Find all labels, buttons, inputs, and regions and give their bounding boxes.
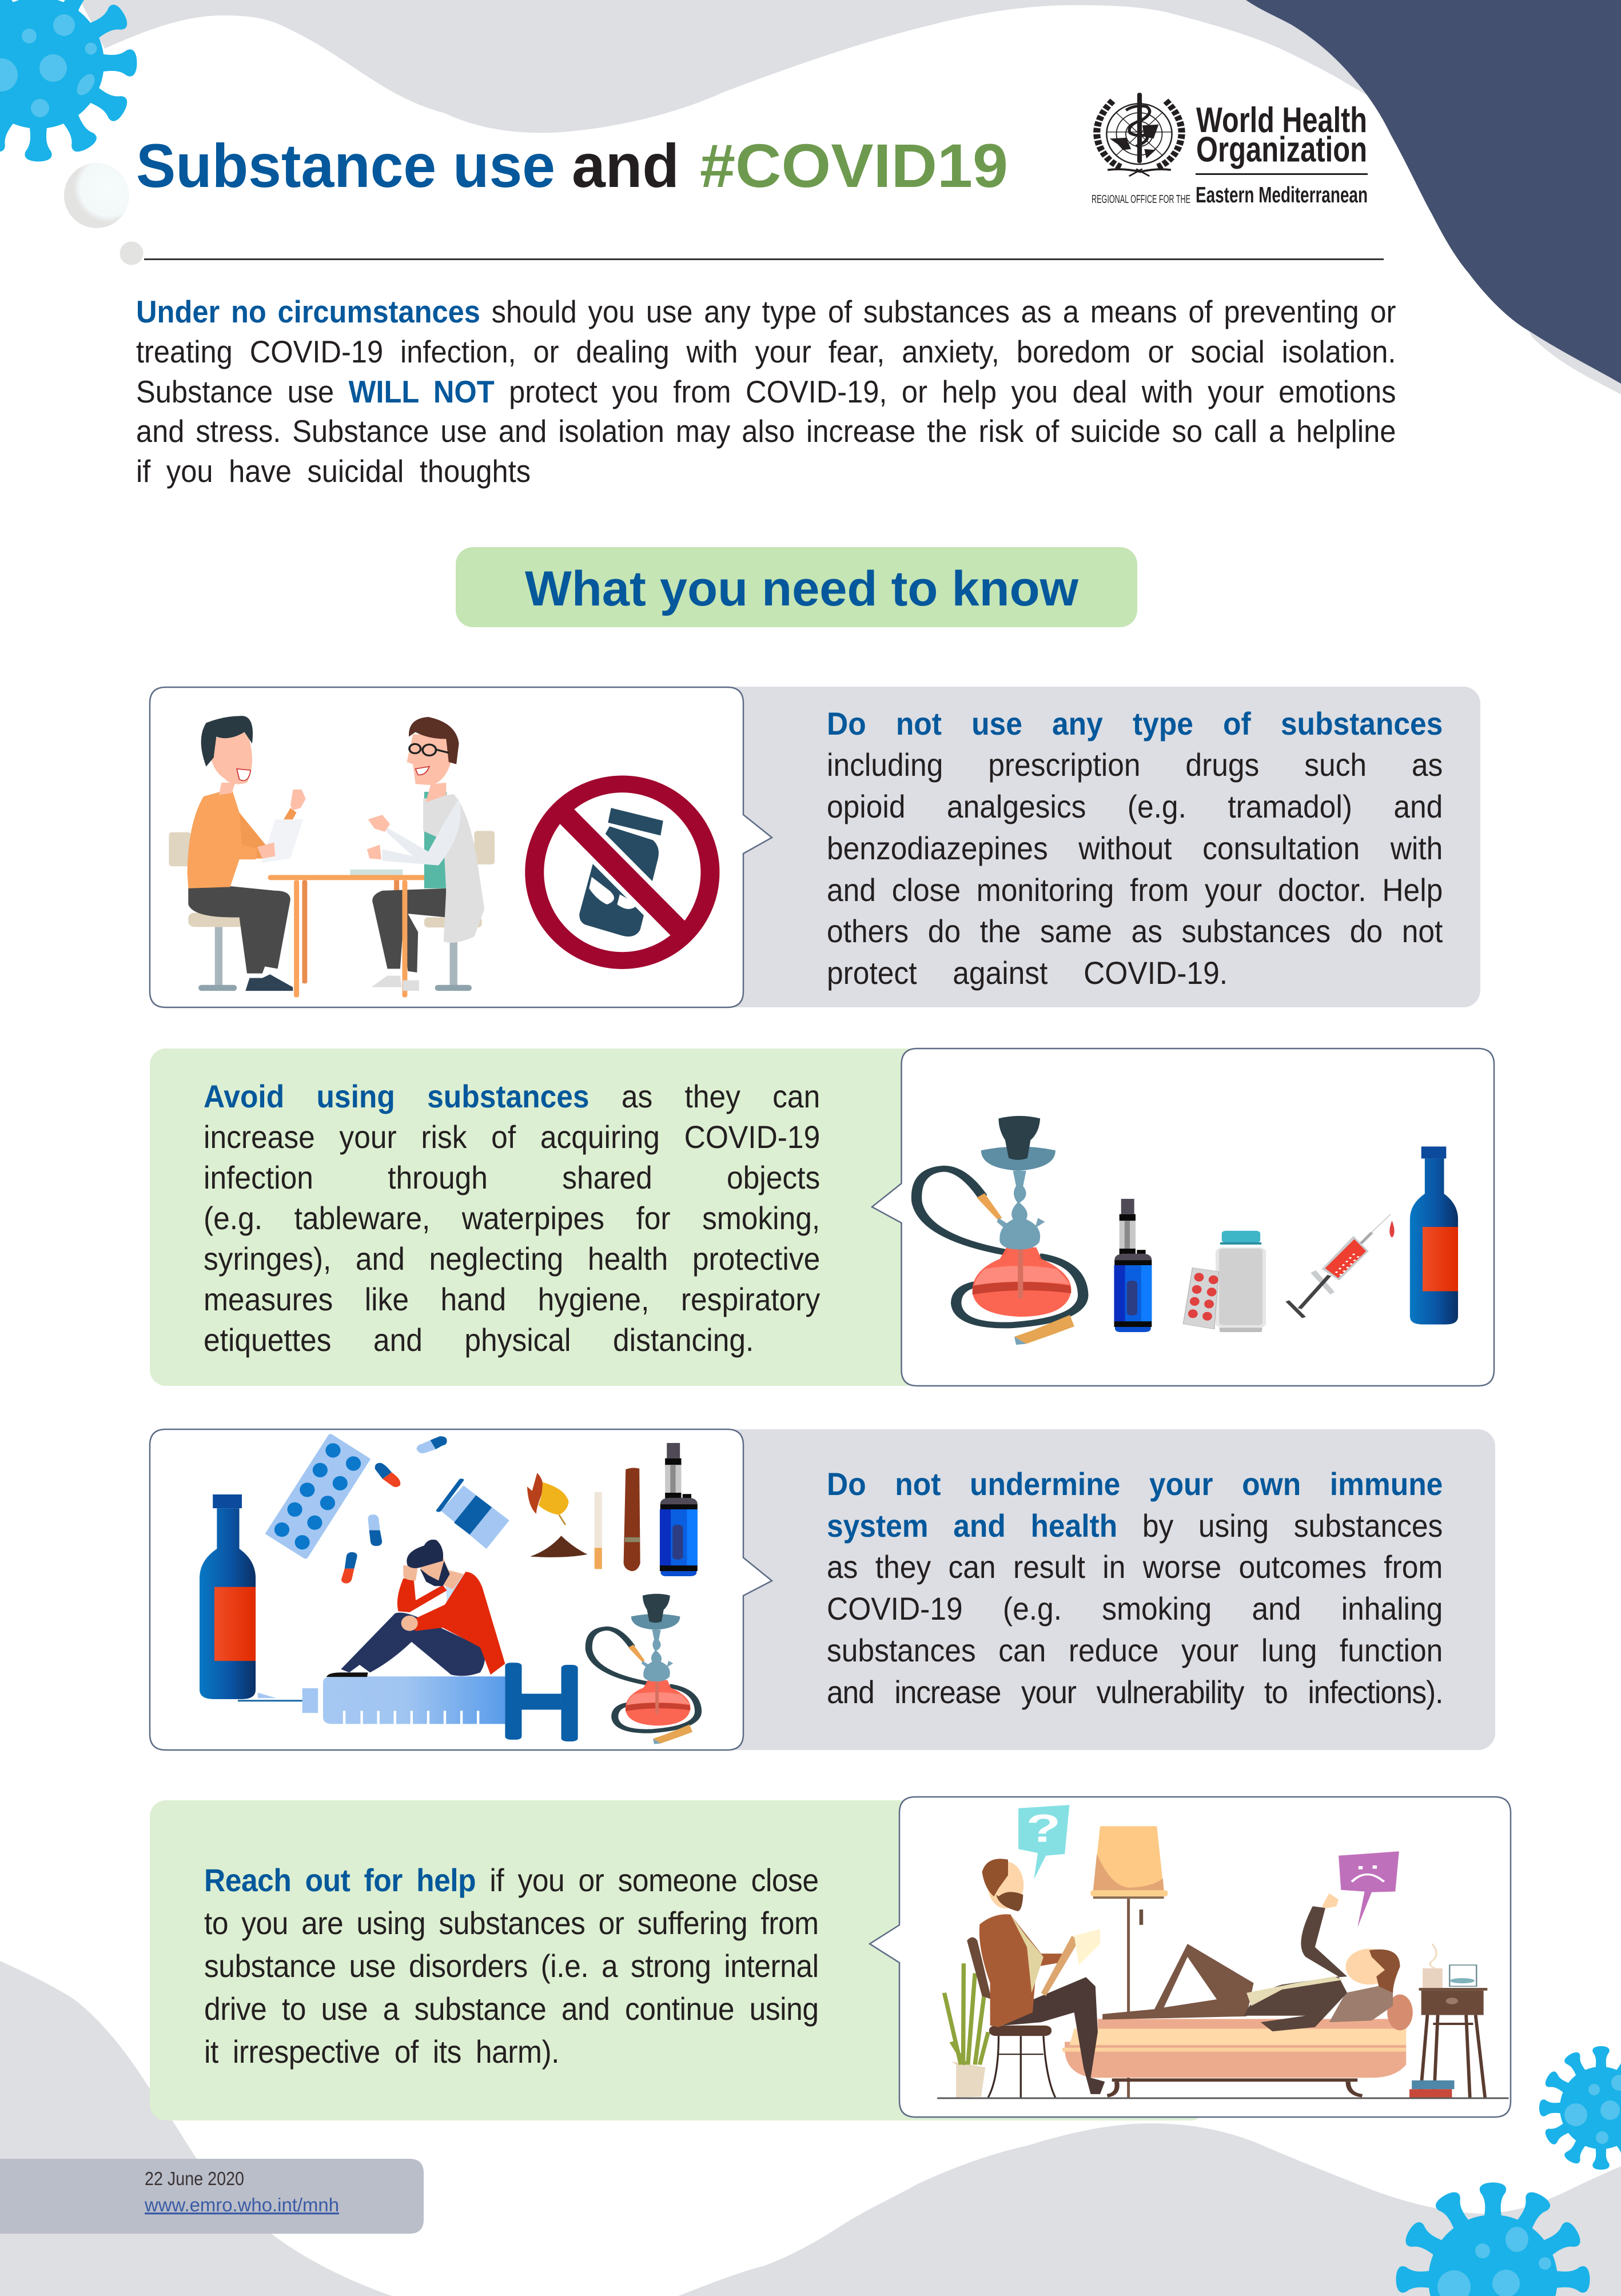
icon: virus top-left (0, 0, 137, 162)
text: card 4: to you are using substances or suffering from (204, 1905, 819, 1941)
illustration: therapy session: ? (1026, 1807, 1061, 1851)
intro paragraph (136, 294, 1396, 489)
footer bar: www.emro.who.int/mnh (144, 2194, 339, 2215)
text: card 3 (827, 1466, 1443, 1710)
background shape: navy corner (1246, 0, 1621, 384)
text: card 1: Do not use any type of substances (827, 705, 1443, 742)
intro paragraph: and stress. Substance use and isolation may also increase the risk of suicide so call a helpline (136, 413, 1396, 449)
text: card 2: etiquettes and physical distancing. (204, 1322, 754, 1358)
decorative sphere large (64, 163, 129, 228)
illustration: waterpipe, vape, pills, syringe and bottle (917, 1116, 1458, 1345)
panel: card 2 (150, 1049, 1494, 1386)
panel: card 3 (150, 1429, 1495, 1750)
footer bar: 22 June 2020 (145, 2168, 244, 2189)
text: card 1: opioid analgesics (e.g. tramadol) and (827, 788, 1443, 824)
text: card 2: Avoid using substances as they can (204, 1078, 820, 1114)
background wave: top grey (80, 0, 1621, 394)
title: #COVID19 (700, 131, 1008, 200)
WHO logo: Organization (1196, 130, 1367, 169)
intro paragraph: Substance use WILL NOT protect you from COVID-19, or help you deal with your emotions (136, 374, 1396, 409)
section heading pill (456, 547, 1137, 627)
title (136, 131, 1008, 200)
text: card 3: and increase your vulnerability to infections). (827, 1674, 1443, 1710)
illustration: man surrounded by substances (200, 1435, 698, 1744)
text: card 4: Reach out for help if you or someone close (204, 1862, 819, 1898)
icon: virus right edge (1539, 2046, 1621, 2170)
text: card 4: it irrespective of its harm). (204, 2034, 559, 2070)
WHO logo (1092, 93, 1368, 208)
text: card 3: as they can result in worse outcomes from (827, 1549, 1443, 1585)
text: card 2: increase your risk of acquiring COVID-19 (204, 1119, 820, 1155)
text: card 2: measures like hand hygiene, respiratory (204, 1281, 820, 1317)
text: card 3: system and health by using substances (827, 1508, 1443, 1544)
text: card 1: protect against COVID-19. (827, 955, 1228, 991)
icon: WHO emblem (1097, 93, 1182, 176)
WHO logo: REGIONAL OFFICE FOR THE (1092, 193, 1190, 206)
text: card 2: infection through shared objects (204, 1159, 820, 1195)
text: card 2 (204, 1078, 820, 1358)
text: card 4: drive to use a substance and continue using (204, 1991, 819, 2027)
panel: card 1 (150, 687, 1480, 1007)
title: and (572, 131, 679, 200)
text: card 1: including prescription drugs such as (827, 747, 1443, 783)
icon: virus bottom (1396, 2183, 1590, 2296)
text: card 3: COVID-19 (e.g. smoking and inhaling (827, 1591, 1443, 1627)
intro paragraph: if you have suicidal thoughts (136, 453, 531, 489)
text: card 1: and close monitoring from your doctor. Help (827, 872, 1443, 908)
text: card 4 (204, 1862, 819, 2070)
text: card 1 (827, 705, 1443, 991)
text: card 2: (e.g. tableware, waterpipes for smoking, (204, 1200, 820, 1236)
panel: card 4 (150, 1797, 1511, 2120)
title: Substance use (136, 131, 555, 200)
footer bar (0, 2159, 424, 2234)
illustration: patient and doctor with no-medication sign (169, 716, 710, 997)
WHO logo: World Health (1196, 101, 1367, 140)
background wave: bottom grey (678, 2123, 1621, 2296)
text: card 1: benzodiazepines without consultation with (827, 830, 1443, 866)
section heading pill: What you need to know (525, 561, 1079, 616)
illustration: therapy session (937, 1805, 1508, 2099)
background shape: bottom-left grey (0, 1961, 392, 2296)
intro paragraph: treating COVID-19 infection, or dealing with your fear, anxiety, boredom or social isolation. (136, 334, 1396, 369)
text: card 2: syringes), and neglecting health protective (204, 1241, 820, 1277)
text: card 3: substances can reduce your lung function (827, 1632, 1443, 1668)
WHO logo: Eastern Mediterranean (1196, 183, 1368, 208)
decorative sphere small (120, 241, 143, 265)
intro paragraph: Under no circumstances should you use any type of substances as a means of preventing or (136, 294, 1396, 329)
text: card 3: Do not undermine your own immune (827, 1466, 1443, 1502)
text: card 4: substance use disorders (i.e. a strong internal (204, 1948, 819, 1984)
text: card 1: others do the same as substances do not (827, 913, 1443, 949)
